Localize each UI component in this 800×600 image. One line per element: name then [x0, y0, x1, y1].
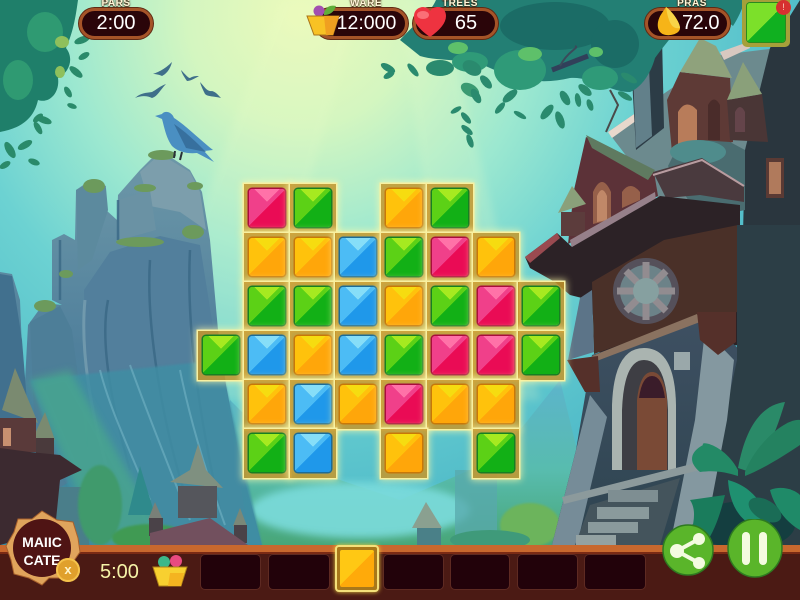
icon: golden gem [658, 7, 680, 36]
coin [56, 558, 80, 582]
waterfall slope [30, 360, 262, 545]
share button [662, 524, 714, 576]
left rocky mountains [0, 150, 262, 545]
stat value [645, 8, 730, 39]
stat value [413, 8, 498, 39]
icon: clock [613, 258, 679, 324]
icon: heart [414, 7, 446, 37]
icon: fruit basket [306, 6, 340, 36]
upper gable [568, 137, 658, 244]
palm foliage [690, 402, 800, 549]
stat value: 65 [455, 12, 477, 34]
top stat: pars [78, 0, 154, 40]
icon: sweets basket [152, 555, 188, 586]
badge text [22, 534, 62, 568]
item slots [200, 554, 646, 590]
teal dome and wall [668, 140, 745, 220]
row 6 tiles [236, 420, 526, 486]
row 1 tiles [238, 178, 480, 236]
row 2 tiles [238, 224, 527, 286]
icon: perched blue bird [155, 112, 214, 162]
notification badge: ! [782, 2, 785, 12]
small turret [727, 94, 768, 142]
large turret [667, 72, 733, 152]
top stat: trees [412, 0, 499, 40]
light rays [130, 0, 540, 400]
stat value: 72.0 [682, 12, 719, 34]
notification badge [776, 0, 791, 15]
bar top trim [0, 545, 800, 554]
chimney [630, 36, 664, 150]
corner tile button [742, 0, 790, 47]
selected orange tile [335, 545, 379, 592]
door [612, 348, 676, 470]
castle [525, 0, 800, 545]
hanging leaves [379, 57, 639, 149]
tower body [592, 225, 738, 354]
small left turret [558, 186, 586, 213]
eave shadow [525, 196, 740, 355]
right dark wall [740, 0, 800, 360]
top stat: pras [644, 0, 731, 40]
small valley temple [112, 444, 442, 552]
badge text: CATE [23, 552, 61, 568]
level badge [6, 510, 80, 586]
stat value [315, 8, 408, 39]
tree foliage top right [379, 0, 745, 149]
falling leaves left [0, 34, 91, 171]
game board [190, 178, 572, 486]
moss patches [34, 150, 204, 312]
timer: 5:00 [100, 561, 139, 583]
pause button [727, 519, 783, 578]
badge text: MAIIC [22, 534, 62, 550]
balcony rail [570, 192, 656, 249]
row 5 tiles [236, 372, 526, 436]
castle main slate roof [608, 40, 800, 200]
coin: x [64, 562, 72, 577]
top stat: ware [306, 0, 409, 40]
bottom bar [0, 545, 800, 600]
stat value: 12:000 [337, 12, 396, 34]
stat value [79, 8, 153, 39]
tree foliage top left [0, 0, 91, 171]
icon: flying birds [135, 62, 221, 98]
row 4 tiles [190, 322, 572, 388]
left temple [0, 368, 155, 545]
green tile [747, 3, 785, 42]
row 3 tiles [238, 274, 572, 336]
distant valley mountains [200, 380, 600, 550]
stone base [552, 318, 800, 545]
stairs [562, 456, 724, 504]
badge shape [6, 510, 80, 586]
orange tile face [340, 550, 374, 587]
stat value: 2:00 [97, 12, 135, 34]
lower roof edge [653, 158, 744, 202]
